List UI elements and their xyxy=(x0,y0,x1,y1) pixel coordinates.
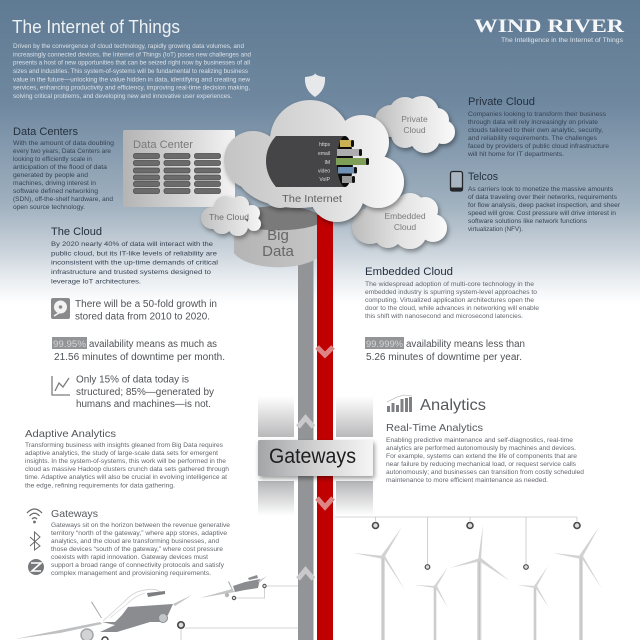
intro text: sizes and industries. This system-of-systems will be fundamental to realizing business xyxy=(13,68,249,75)
panel: embedded cloud text: Embedded Cloud xyxy=(365,266,453,278)
panel: private cloud text xyxy=(467,96,609,158)
stat: 99.95% availability: availability means as much as xyxy=(89,339,217,350)
panel: embedded cloud text: door to the cloud, while advances in networking will enable xyxy=(365,305,539,312)
embedded cloud: Embedded xyxy=(384,211,426,221)
the cloud: The Cloud xyxy=(209,212,249,222)
panel: telcos: for flow analysis, deep packet inspection, and sheer xyxy=(468,202,621,209)
private cloud: Cloud xyxy=(403,125,426,135)
red data bar xyxy=(317,215,333,640)
panel: data centers text: Data Centers xyxy=(13,126,78,138)
logo: Wind River: The Intelligence in the Internet of Things xyxy=(501,37,624,44)
panel: data centers text: With the amount of data doubling xyxy=(13,140,114,147)
stat: 99.95% availability: 21.56 minutes of downtime per month. xyxy=(54,352,225,363)
stat: 99.95% availability: 99.95% xyxy=(53,339,87,350)
stat: 99.999% availability: 99.999% xyxy=(366,339,404,350)
stat: stored data growth: There will be a 50-fold growth in xyxy=(75,299,217,310)
the internet cloud: The Internet xyxy=(282,193,342,205)
protocol labels xyxy=(318,142,331,183)
panel: the cloud text xyxy=(51,226,219,285)
panel: adaptive analytics xyxy=(25,428,229,490)
panel: telcos: software solutions like network functions xyxy=(468,218,588,225)
panel: telcos: Telcos xyxy=(468,171,498,183)
cable wires xyxy=(336,140,369,183)
stat: structured data: humans and machines—is not. xyxy=(76,399,211,410)
wing xyxy=(15,622,102,639)
intro text: solving critical problems, and developing new and innovative user experiences. xyxy=(13,93,232,100)
icon: bluetooth xyxy=(30,532,40,550)
heading: analytics: Analytics xyxy=(420,397,486,414)
intro text: value in the future—unlocking the value hidden in data, identifying and creating new xyxy=(13,76,250,83)
stat: 99.999% availability xyxy=(365,337,525,363)
the cloud xyxy=(201,196,261,236)
panel: real-time analytics: near failure by reducing mechanical load, or request service calls xyxy=(386,461,577,468)
gateways banner xyxy=(258,440,373,476)
panel: the cloud text: infrastructure and trusted systems designed to xyxy=(51,269,211,276)
panel: telcos: speed will grow. Cost pressure will drive interest in xyxy=(468,210,616,217)
panel: adaptive analytics: adaptive analytics, the study of large-scale data sets for emergent xyxy=(25,450,218,457)
panel: gateways text: analytics, and the cloud are transforming businesses, and xyxy=(51,538,219,545)
large airplane xyxy=(15,589,192,640)
stat: structured data: structured; 85%—generated by xyxy=(76,387,214,398)
panel: data centers text: (SDN), off-the-shelf hardware, and xyxy=(13,196,113,203)
protocol labels: https xyxy=(319,142,330,148)
panel: adaptive analytics: cloud as massive Hadoop clusters crunch data sets gathered through xyxy=(25,466,229,473)
panel: gateways text xyxy=(51,508,230,577)
panel: gateways text: territory “north of the gateway,” where app stores, adaptive xyxy=(51,530,227,537)
panel: data centers text xyxy=(13,126,114,211)
icon: bar chart analytics xyxy=(387,395,412,412)
panel: data centers text: machines, driving interest in xyxy=(13,180,96,187)
turbine 5 xyxy=(553,527,602,640)
big data cylinder: Data xyxy=(262,243,294,260)
panel: private cloud text: Private Cloud xyxy=(468,96,535,108)
big data cylinder: Big xyxy=(267,227,289,244)
stat: stored data growth xyxy=(51,298,217,322)
logo: Wind River xyxy=(474,16,624,44)
stat: 99.95% availability xyxy=(52,337,225,363)
panel: real-time analytics: maintenance to more efficient maintenance as needed. xyxy=(386,477,548,484)
big data cylinder xyxy=(234,206,322,267)
panel: embedded cloud text: The widespread adoption of multi-core technology in the xyxy=(365,281,534,288)
panel: real-time analytics xyxy=(386,422,584,484)
panel: real-time analytics: autonomously; and businesses can transition from costly scheduled xyxy=(386,469,584,476)
panel: data centers text: looking to efficiently scale in xyxy=(13,156,92,163)
panel: data center graphic xyxy=(123,130,235,207)
panel: private cloud text: will hit home for IT departments. xyxy=(467,151,564,158)
cable xyxy=(266,136,369,187)
panel: gateways text: complex management and provisioning requirements. xyxy=(51,570,211,577)
panel: gateways text: coexists with rapid innovation. Gateway devices must xyxy=(51,554,208,561)
private cloud xyxy=(375,96,455,153)
fuselage outline xyxy=(103,589,165,621)
embedded cloud: Cloud xyxy=(394,222,416,232)
icon: wifi xyxy=(27,509,42,523)
icon: line graph xyxy=(52,376,70,395)
panel: embedded cloud text: this shift with nanosecond and microsecond latencies. xyxy=(365,313,523,320)
panel: the cloud text: inconsistent with the up-time demands of critical xyxy=(51,260,219,267)
private cloud: Private xyxy=(401,114,428,124)
panel: data centers text: software defined networking xyxy=(13,188,98,195)
protocol labels: VoIP xyxy=(319,177,331,183)
panel: real-time analytics: analytics are performed autonomously by machines and devices. xyxy=(386,445,576,452)
panel: telcos: virtualization (NFV). xyxy=(468,226,523,233)
stat: 99.999% availability: 5.26 minutes of downtime per year. xyxy=(366,352,522,363)
intro text: increasingly connected devices, the Internet of Things (IoT) poses new challenges and xyxy=(13,51,251,58)
stat: stored data growth: stored data from 2010 to 2020. xyxy=(75,312,210,322)
panel: data center graphic: Data Center xyxy=(133,139,193,151)
turbine 3 xyxy=(450,525,510,640)
panel: data centers text: anticipation of the flood of data xyxy=(13,164,107,171)
panel: the cloud text: public cloud, but its IT-like levels of reliability are xyxy=(51,250,217,257)
turbine 1 xyxy=(353,527,405,640)
the internet cloud xyxy=(224,100,404,222)
icon: shield xyxy=(305,73,325,97)
panel: gateways text: Gateways xyxy=(51,508,98,520)
stat: structured data: Only 15% of data today is xyxy=(76,374,189,386)
panel: the cloud text: By 2020 nearly 40% of data will interact with the xyxy=(51,241,213,248)
gateways banner: Gateways xyxy=(269,445,356,468)
panel: adaptive analytics: time. Adaptive analytics will also be crucial in evolving intelligence at xyxy=(25,474,227,481)
panel: embedded cloud text xyxy=(365,266,539,320)
panel: embedded cloud text: computing. Virtualized application architectures open the xyxy=(365,297,534,304)
protocol labels: IM xyxy=(324,160,330,166)
panel: data centers text: every two years, Data Centers are xyxy=(13,148,111,155)
panel: the cloud text: leverage IoT architectures. xyxy=(51,278,141,285)
panel: adaptive analytics: the edge, refining requirements for data gathering. xyxy=(25,482,175,490)
stat: structured data xyxy=(52,374,214,410)
turbine 4 xyxy=(517,566,549,640)
icon: zigbee xyxy=(28,559,44,575)
panel: real-time analytics: For example, systems can extend the life of components that are xyxy=(386,453,577,460)
panel: telcos xyxy=(450,171,621,233)
panel: adaptive analytics: Adaptive Analytics xyxy=(25,428,116,440)
panel: private cloud text: faced by providers of public cloud infrastructure xyxy=(468,143,609,150)
panel: real-time analytics: Real-Time Analytics xyxy=(386,422,483,434)
panel: gateways text: those devices “south of the gateway,” where cost pressure xyxy=(51,546,223,553)
panel: the cloud text: The Cloud xyxy=(51,226,102,238)
icon: hard drive xyxy=(51,298,70,319)
panel: adaptive analytics: insights. In the system-of-systems, this work will be performed in the xyxy=(25,458,226,465)
intro text xyxy=(13,43,251,100)
panel: private cloud text: and reliability requirements. The challenges xyxy=(468,135,598,142)
data flow bars xyxy=(258,255,373,640)
intro text: Driven by the convergence of cloud technology, rapidly growing data volumes, and xyxy=(13,43,244,50)
airplane sensor wires xyxy=(178,584,298,640)
panel: telcos: As carriers look to monetize the massive amounts xyxy=(468,186,614,193)
wind turbines with sensor wires xyxy=(335,517,602,640)
intro text: services, enhancing productivity and efficiency, improving real-time decision making, xyxy=(13,85,250,92)
panel: gateways text: support a broad range of connectivity protocols and satisfy xyxy=(51,562,225,569)
panel: data centers text: open source technology. xyxy=(13,204,85,211)
logo: Wind River: WIND RIVER xyxy=(474,16,624,37)
panel: adaptive analytics: Transforming business with insights gleaned from Big Data requires xyxy=(25,442,224,449)
embedded cloud xyxy=(352,193,447,249)
panel: private cloud text: Companies looking to transform their business xyxy=(468,111,607,118)
panel: gateways text: Gateways sit on the horizon between the revenue generative xyxy=(51,522,230,529)
small airplane xyxy=(200,575,267,598)
icon: phone xyxy=(450,172,463,191)
panel: data centers text: generated by people and xyxy=(13,172,88,179)
panel: embedded cloud text: embedded industry is spurring system-level approaches to xyxy=(365,289,537,296)
panel: private cloud text: through data will rely increasingly on private xyxy=(468,119,598,126)
stat: 99.999% availability: availability means less than xyxy=(406,339,525,350)
panel: real-time analytics: Enabling predictive maintenance and self-diagnostics, real-time xyxy=(386,437,573,444)
server racks xyxy=(134,154,220,194)
turbine 2 xyxy=(414,567,448,640)
fuselage belly xyxy=(100,604,173,632)
title: The Internet of Things xyxy=(12,17,180,37)
panel: telcos: of data traveling over their networks, requirements xyxy=(468,194,618,201)
panel: private cloud text: clouds tailored to their own analytic, security, xyxy=(468,127,603,134)
protocol labels: email xyxy=(318,151,330,157)
protocol labels: video xyxy=(318,168,330,174)
intro text: presents a host of new opportunities that can be seized right now by businesses of all xyxy=(13,60,251,67)
